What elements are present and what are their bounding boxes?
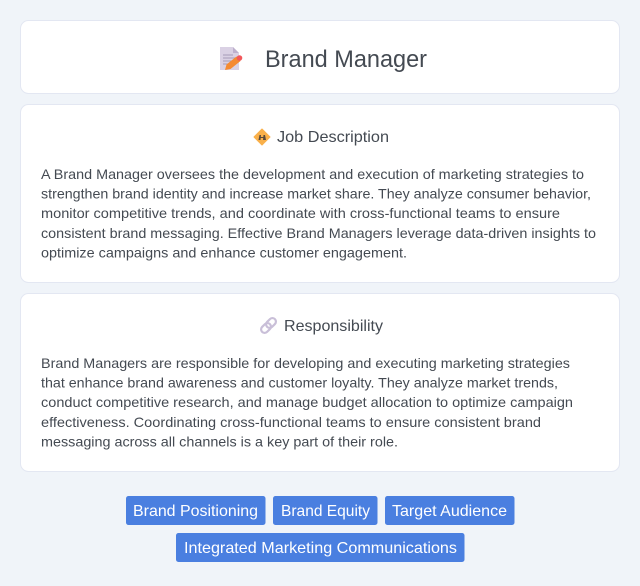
- heading: job description: Job Description: [277, 129, 389, 146]
- icon: chain link: [260, 317, 277, 334]
- title: Brand Manager: [265, 46, 427, 73]
- text block: responsibility: [41, 355, 573, 449]
- panel: responsibility: [20, 294, 620, 472]
- icon: document with pencil: [220, 47, 242, 70]
- text block: job description: monitor competitive trends, and coordinate with cross-functional teams to ensure: [41, 205, 560, 221]
- text block: job description: strengthen brand identity and increase market share. They analyze consumer behavior,: [41, 186, 591, 202]
- panel: job description: [20, 104, 620, 282]
- text block: job description: optimize campaigns and enhance customer engagement.: [41, 244, 407, 260]
- tag: integrated marketing communications: Integrated Marketing Communications: [184, 540, 457, 557]
- tag: brand equity: Brand Equity: [281, 503, 370, 520]
- tag: brand positioning: [126, 496, 266, 525]
- heading: responsibility: Responsibility: [284, 318, 383, 335]
- text block: job description: [41, 166, 596, 260]
- panel: title card: [20, 20, 620, 94]
- tag: target audience: Target Audience: [392, 503, 507, 520]
- text block: job description: consistent brand messaging. Effective Brand Managers leverage data-driven insights to: [41, 225, 596, 241]
- text block: responsibility: messaging across all channels is a key part of their role.: [41, 433, 398, 449]
- text block: responsibility: Brand Managers are responsible for developing and executing marketing strategies: [41, 355, 570, 371]
- tag: integrated marketing communications: [176, 533, 464, 562]
- tag: target audience: [385, 496, 514, 525]
- text block: responsibility: that enhance brand awareness and customer loyalty. They analyze market trends,: [41, 375, 558, 391]
- tag: brand equity: [273, 496, 378, 525]
- text block: responsibility: conduct competitive research, and manage budget allocation to optimize campaign: [41, 394, 573, 410]
- text block: responsibility: effectiveness. Coordinating cross-functional teams to ensure consistent brand: [41, 414, 541, 430]
- icon: diamond sign: [254, 129, 270, 145]
- tag: brand positioning: Brand Positioning: [133, 503, 258, 520]
- text block: job description: A Brand Manager oversees the development and execution of marketing strategies to: [41, 166, 584, 182]
